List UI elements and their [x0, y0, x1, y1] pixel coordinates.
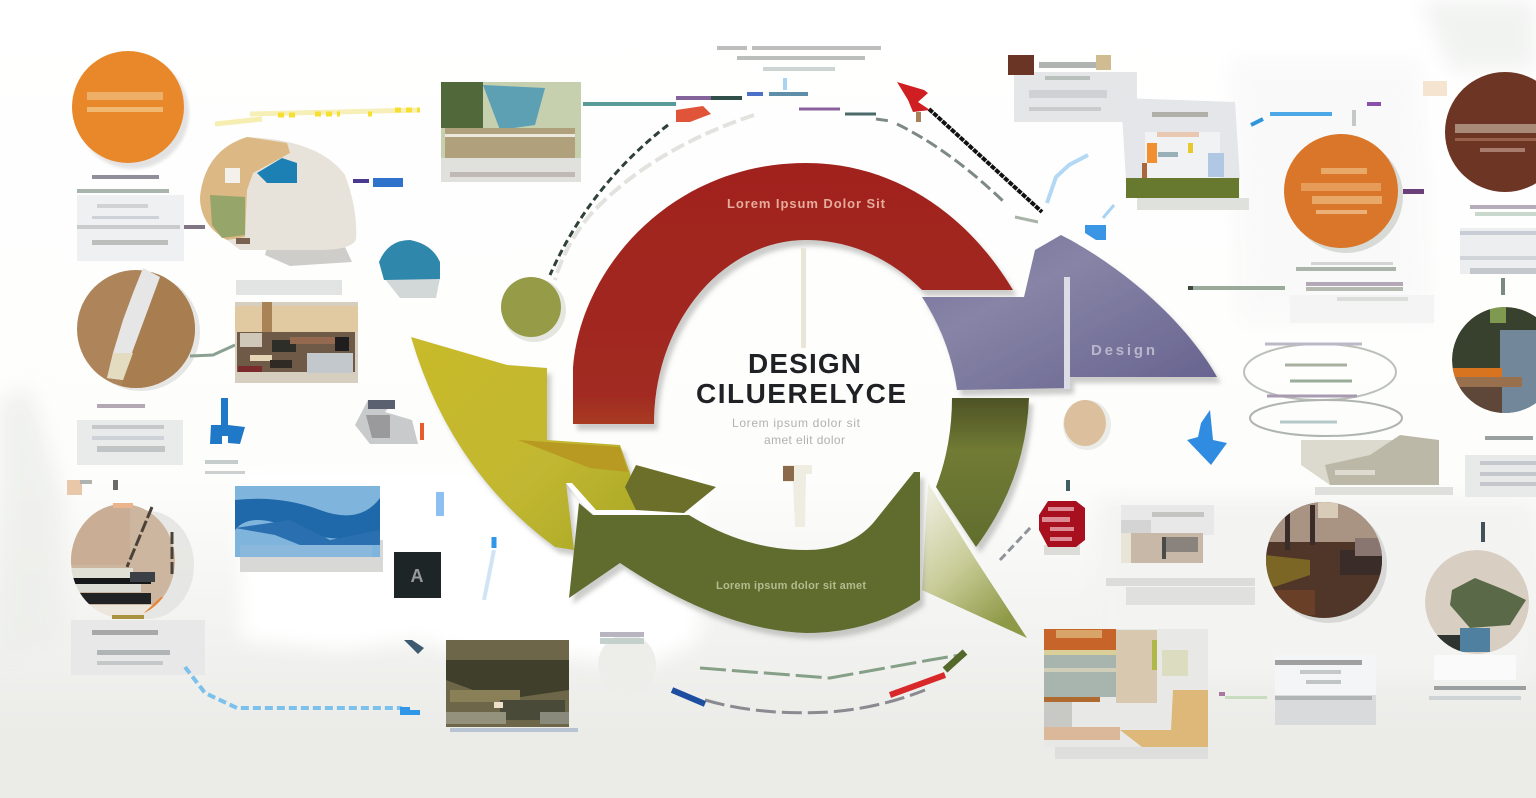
yellow arrow segment — [411, 337, 636, 550]
top lines — [583, 46, 1381, 240]
red bottom stroke — [890, 675, 945, 695]
subtitle — [732, 416, 861, 447]
vertical stem top — [801, 248, 806, 348]
blue flame icon — [205, 398, 245, 474]
pale chip — [1423, 81, 1447, 96]
orange caption right — [1290, 262, 1434, 323]
purple arrow segment — [922, 235, 1217, 390]
dotted blue arrow — [185, 667, 402, 708]
brown circle top right — [1445, 72, 1536, 192]
pale round tag — [598, 632, 656, 696]
red stack icon — [1039, 480, 1085, 555]
subtitle: amet elit dolor — [764, 433, 845, 447]
olive bottom stroke — [945, 652, 965, 670]
connector — [1403, 189, 1424, 194]
top heading — [717, 46, 881, 71]
green dart highlight — [625, 465, 716, 513]
peach circle — [1063, 400, 1111, 450]
kitchen caption — [236, 280, 342, 295]
brown connector — [190, 345, 235, 356]
orange caption — [77, 175, 205, 261]
interior connector — [1219, 692, 1267, 699]
top multicolor line — [583, 78, 808, 104]
right caption — [1460, 205, 1536, 295]
white sliver — [566, 483, 670, 516]
blue bottom stroke — [672, 690, 705, 704]
orange circle right — [1284, 134, 1403, 253]
title: CILUERELYCE — [696, 378, 906, 409]
oval list — [1244, 344, 1402, 436]
small tick — [1481, 522, 1485, 542]
black tag icon: A — [410, 566, 424, 586]
yellow dashed line — [215, 110, 420, 124]
blue purple line — [1251, 104, 1381, 126]
purple segment divider — [1064, 277, 1070, 389]
brown circle — [77, 268, 200, 391]
plant circle — [1425, 550, 1529, 654]
card 1 — [1008, 55, 1137, 122]
curved grey line — [799, 109, 1038, 222]
dark scene circle — [1452, 307, 1536, 417]
small tool icon — [355, 400, 424, 444]
olive ball — [501, 277, 566, 342]
kitchen photo — [235, 302, 358, 383]
plant caption — [1429, 655, 1526, 700]
blue ticks — [440, 492, 494, 600]
caption right — [1465, 436, 1536, 497]
bottom lines — [672, 652, 965, 713]
grey-green line — [1188, 286, 1285, 290]
stairs circle — [60, 503, 194, 619]
village sketch — [1301, 435, 1453, 495]
right olive segment — [936, 398, 1029, 547]
pale parallel connector — [555, 115, 754, 280]
blue flame right — [1187, 410, 1227, 465]
stairs caption — [71, 620, 205, 675]
red arc segment — [573, 163, 1013, 424]
pale arrow segment — [922, 483, 1027, 638]
green bottom arrow — [569, 472, 920, 633]
right column — [1000, 72, 1536, 759]
teal pebble — [379, 240, 440, 298]
title — [696, 348, 906, 409]
bottom arc label: Lorem ipsum dolor sit amet — [716, 580, 866, 592]
upper arc line — [700, 655, 960, 678]
dark tick — [404, 640, 424, 654]
lower arc line — [705, 690, 925, 713]
dark curved connector — [550, 125, 668, 275]
top photo — [441, 82, 581, 182]
blue squiggle — [1047, 155, 1088, 203]
waves photo — [235, 486, 383, 572]
purple label: Design — [1091, 342, 1155, 359]
beige map blob — [200, 137, 356, 266]
blue arrow head — [400, 707, 420, 715]
central cycle diagram — [411, 163, 1217, 638]
sofa photo — [1106, 505, 1255, 605]
brown caption — [77, 404, 183, 465]
grey sketch — [1000, 527, 1031, 560]
red marker — [676, 106, 711, 122]
left middle photos — [185, 82, 754, 732]
left column circles — [60, 51, 420, 675]
forest circle — [1260, 500, 1390, 625]
title: DESIGN — [748, 348, 861, 379]
red pin — [897, 82, 930, 122]
blue tick — [1085, 205, 1114, 240]
interior photo — [1044, 629, 1208, 759]
yellow dart shading — [518, 440, 628, 472]
red arc label: Lorem Ipsum Dolor Sit — [727, 196, 886, 211]
house illustration — [1121, 98, 1249, 210]
right lower caption — [1275, 655, 1376, 725]
orange circle — [72, 51, 189, 169]
blue tick — [353, 178, 403, 187]
hedge photo — [446, 640, 578, 732]
subtitle: Lorem ipsum dolor sit — [732, 416, 861, 430]
black diagonal — [929, 109, 1042, 212]
vertical stem bottom — [783, 465, 812, 527]
black tag icon — [394, 552, 441, 598]
peach square — [67, 480, 118, 495]
